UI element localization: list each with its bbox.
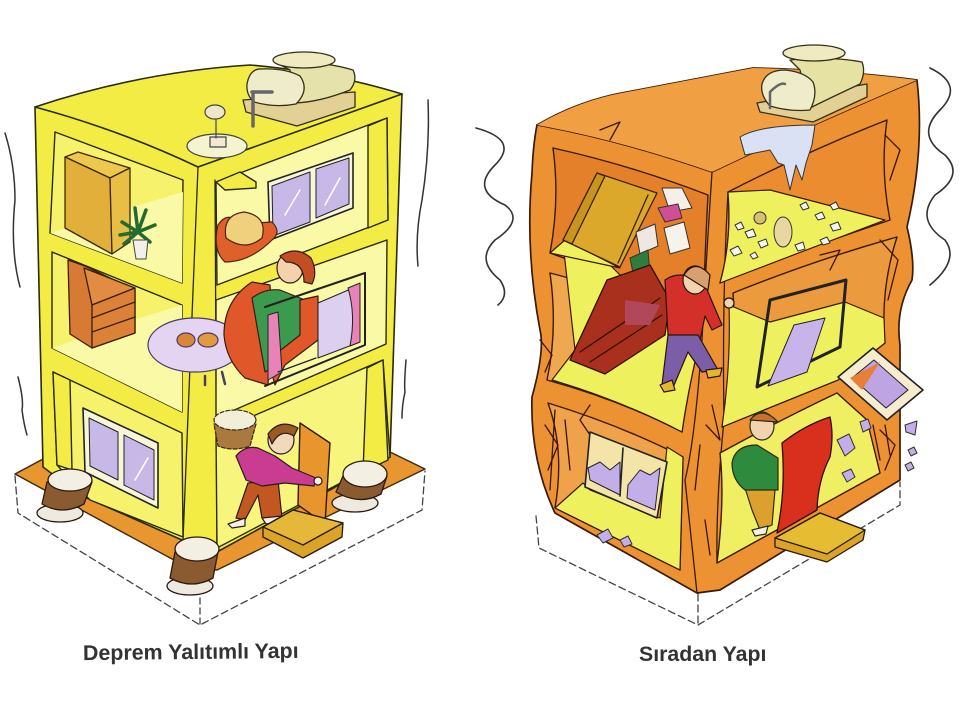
cat on cushion [216, 212, 277, 262]
isolator bearings [37, 461, 387, 595]
caption: ordinary building: Sıradan Yapı [639, 642, 766, 666]
motion lines [5, 100, 428, 435]
rooms: left wall [50, 132, 183, 537]
tilted window [757, 280, 846, 387]
rooms: right wall [216, 118, 390, 548]
broken lower window [585, 432, 667, 518]
tilted wardrobe [563, 173, 657, 267]
seated woman [224, 251, 318, 385]
yellow floors [550, 190, 885, 570]
ghost bearing behind person [214, 410, 256, 449]
rooms: orange walls [547, 120, 897, 570]
dresser [68, 260, 135, 348]
glass shards [597, 419, 917, 547]
table lamp on roof [187, 105, 247, 158]
entrance step [775, 513, 865, 562]
building body [530, 68, 919, 593]
motion squiggles [476, 68, 953, 305]
falling window frame [838, 348, 923, 420]
falling plaster debris [730, 202, 841, 259]
water leak [740, 125, 815, 190]
door [298, 423, 330, 524]
building body [35, 65, 402, 552]
round table [148, 318, 242, 385]
falling objects [630, 188, 692, 278]
panel: ordinary building [476, 45, 953, 625]
person at door [228, 424, 322, 528]
broken water tank [757, 45, 867, 122]
wardrobe [65, 152, 130, 254]
entrance step [263, 510, 343, 558]
window lower [83, 408, 158, 508]
water tank [243, 52, 355, 126]
window upper [268, 153, 353, 240]
man at door [732, 412, 778, 536]
potted plant [120, 208, 155, 259]
foundation plate [15, 452, 425, 625]
panel: earthquake-isolated building [5, 52, 428, 625]
wall cracks [540, 122, 900, 555]
caption: isolated building: Deprem Yalıtımlı Yapı [83, 639, 299, 665]
toppled dresser [570, 265, 670, 374]
dashed ground outline [536, 482, 900, 625]
falling person [660, 266, 734, 392]
window middle [265, 273, 365, 386]
red door [777, 417, 832, 533]
